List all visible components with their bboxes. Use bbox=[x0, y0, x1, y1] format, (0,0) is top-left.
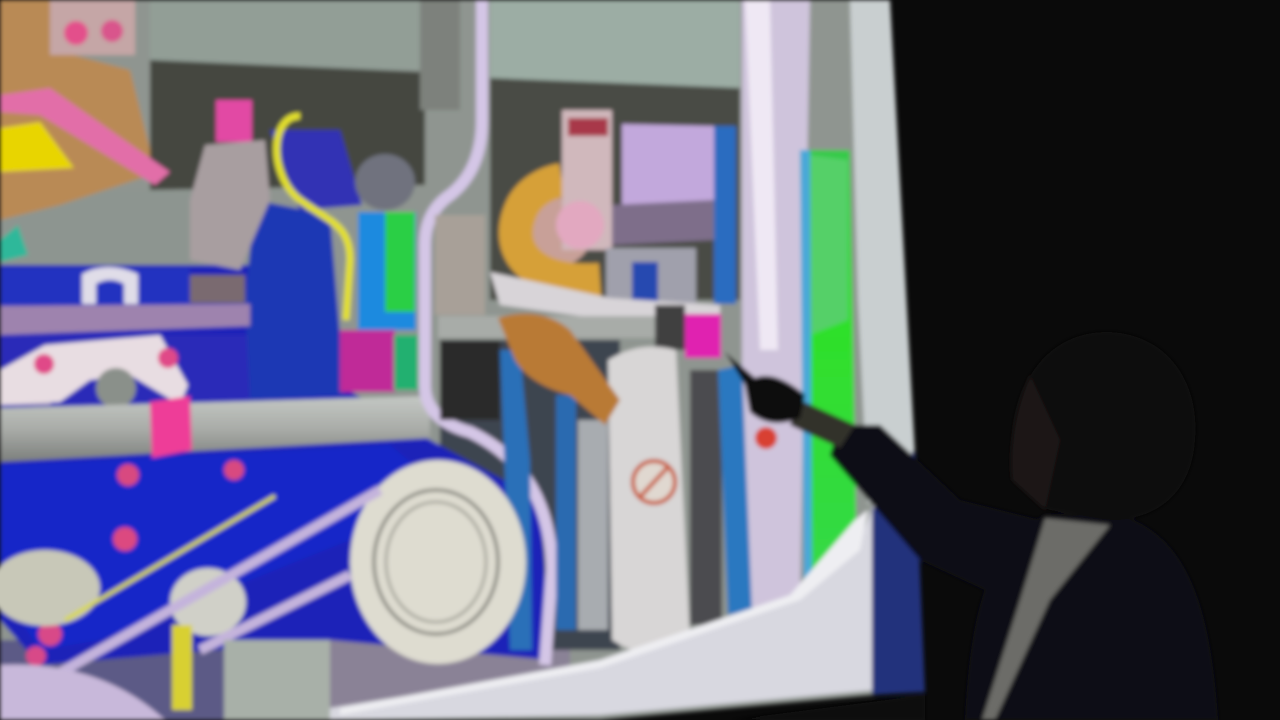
dark blue screen bottom edge bbox=[872, 450, 925, 695]
coloured connector block bbox=[340, 212, 418, 392]
tan insulated shape top left bbox=[0, 0, 170, 262]
hand and pointer bbox=[725, 352, 805, 423]
blue vertical strip upper bbox=[714, 126, 736, 304]
white shelf bbox=[490, 272, 720, 335]
white lower sweep frame bbox=[330, 500, 875, 720]
projection screen base bbox=[0, 0, 915, 720]
small grey box bottom bbox=[224, 640, 330, 720]
pink and white column bbox=[556, 110, 612, 250]
lavender horizontal pipe bbox=[0, 304, 250, 335]
forearm bbox=[790, 400, 855, 448]
coil spring bbox=[355, 154, 415, 210]
blue strip lower bbox=[718, 365, 752, 615]
small pulleys bottom left bbox=[0, 550, 246, 636]
pink and white fitting bbox=[190, 100, 270, 270]
mesh panel bbox=[690, 370, 722, 625]
person silhouette bbox=[725, 332, 1218, 720]
second hand in orange tone bbox=[498, 314, 620, 425]
green panel bbox=[800, 150, 856, 598]
bottom left lavender pipes bbox=[0, 665, 165, 720]
light lavender column with red knob bbox=[742, 0, 810, 610]
yellow cable loop bbox=[277, 116, 350, 320]
upper grey machinery panels bbox=[0, 0, 740, 300]
dark floor strip bbox=[730, 695, 925, 720]
white bracket on blue field bbox=[0, 267, 244, 666]
large grey pipe with pink collar bbox=[0, 396, 430, 462]
white cylinder with prohibition sign bbox=[578, 347, 690, 652]
body bbox=[965, 515, 1218, 720]
blue machinery field left bbox=[0, 130, 550, 665]
head and hair bbox=[1012, 332, 1196, 520]
orange flexible duct bbox=[516, 180, 600, 280]
diagonal lavender rods and yellow line bbox=[30, 490, 380, 710]
lavender vertical conduit S-curve bbox=[425, 0, 552, 665]
white shirt collar bbox=[982, 518, 1110, 720]
lavender box bbox=[612, 124, 714, 245]
blue strips centre bbox=[500, 350, 576, 650]
face bbox=[1011, 375, 1060, 510]
grey pump cylinder bbox=[606, 248, 696, 304]
centre cluster white detail bbox=[435, 215, 485, 315]
magenta valve bbox=[685, 314, 721, 358]
arm bbox=[830, 425, 1040, 590]
large white disc bbox=[350, 460, 526, 664]
dark bracket near valve bbox=[655, 305, 685, 350]
